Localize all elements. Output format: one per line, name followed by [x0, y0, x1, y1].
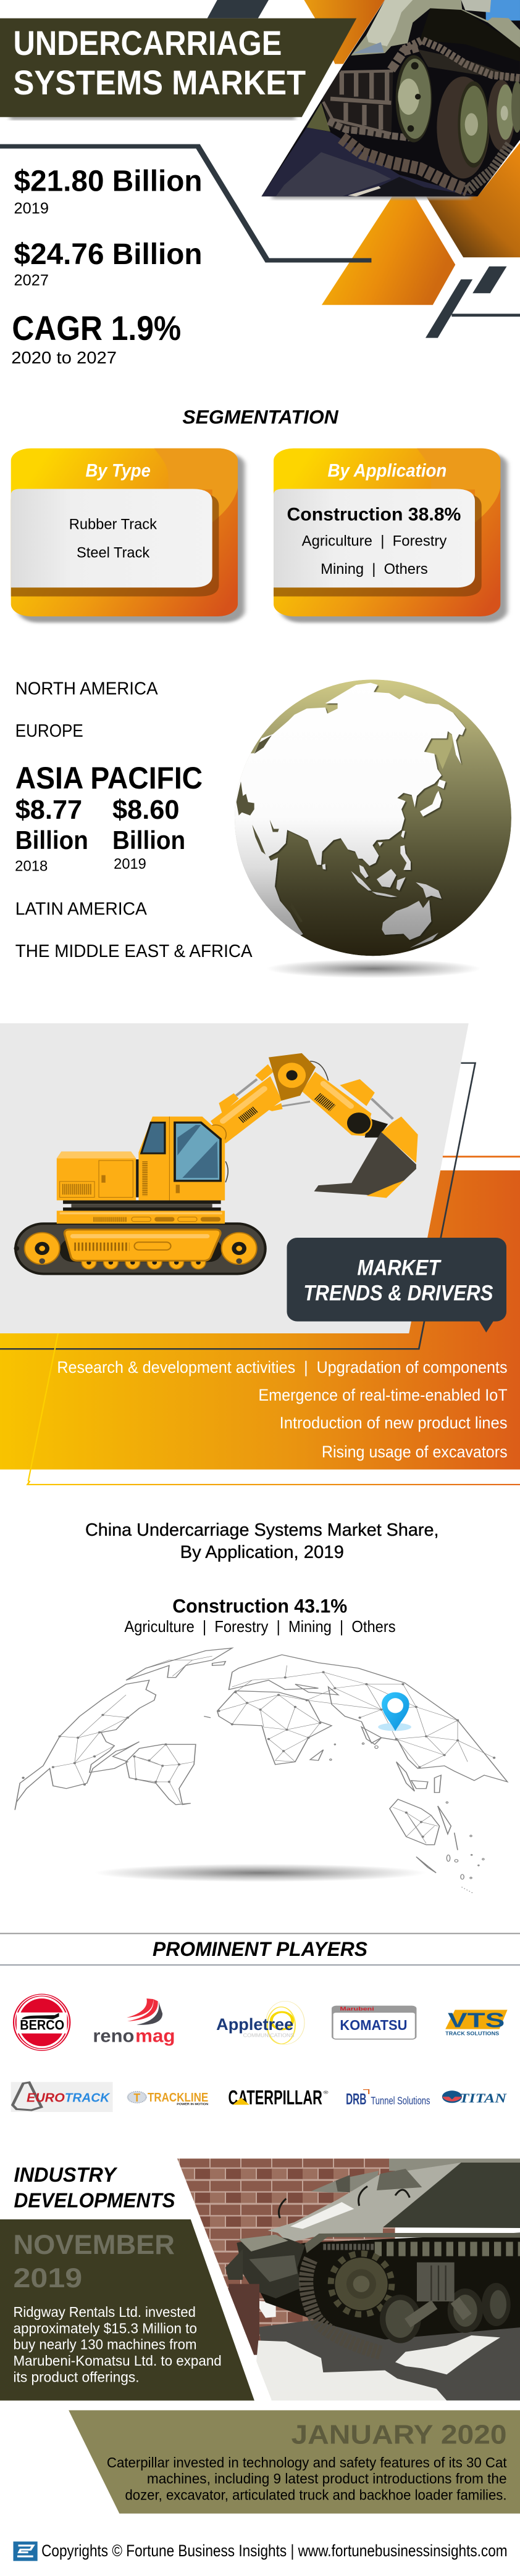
photo shadow [272, 194, 471, 199]
section: prominent players: CATERPILLAR [228, 2087, 322, 2109]
stat: 2027 value: 2027 [14, 272, 49, 289]
wireframe world map [15, 1648, 508, 1893]
logo: Renomag: mag [135, 2026, 175, 2046]
slate frame line [0, 1063, 476, 1349]
top slate stripe [208, 0, 269, 19]
tank in snow photo [177, 2158, 520, 2401]
logo: Titan: TITAN [459, 2091, 507, 2105]
callout: market trends and drivers: MARKET [357, 1255, 442, 1280]
Asia Pacific highlight: $8.77 [15, 795, 82, 825]
title [13, 24, 306, 102]
stat: 2019 value [14, 165, 203, 217]
small slate shapes [426, 267, 520, 338]
logo: Komatsu: Marubeni [340, 2007, 374, 2012]
logo: Appletree: Appletree [216, 2015, 293, 2034]
stat: CAGR: 2020 to 2027 [11, 348, 117, 367]
icon: excavator [14, 1053, 418, 1274]
segmentation heading: SEGMENTATION [182, 406, 339, 428]
top orange shape [304, 0, 385, 64]
region list [15, 679, 253, 961]
section: China share [15, 1481, 520, 1893]
chart title: By Application, 2019 [180, 1542, 344, 1562]
card: by application: Mining | Others [321, 560, 428, 577]
logo: Komatsu: KOMATSU [340, 2018, 407, 2033]
stat: 2019 value: $21.80 Billion [14, 165, 203, 197]
panel: November 2019: 2019 [13, 2263, 82, 2293]
Asia Pacific highlight: $8.60 [112, 795, 180, 825]
title banner [0, 19, 356, 117]
logo: Trackline: T [133, 2092, 141, 2104]
panel: November 2019: buy nearly 130 machines from [13, 2337, 196, 2353]
heading: PROMINENT PLAYERS [153, 1938, 367, 1960]
globe shadow [267, 959, 480, 978]
yellow frame line [28, 1333, 58, 1481]
stat: CAGR: CAGR 1.9% [12, 309, 181, 347]
logo: Renomag: reno [93, 2026, 134, 2046]
section: prominent players: Tunnel Solutions [371, 2095, 430, 2106]
logo: Komatsu [332, 2006, 416, 2040]
Asia Pacific highlight: 2018 [15, 858, 48, 874]
icon: location pin [378, 1692, 411, 1731]
chart title [85, 1520, 438, 1562]
orange accent line [443, 1156, 520, 1158]
orange panel [0, 1170, 520, 1470]
logo: DRB: DRB [346, 2090, 366, 2108]
card: by type [11, 449, 245, 623]
logo: Eurotrack: TRACK [65, 2091, 110, 2105]
card: by type: Rubber Track [69, 516, 157, 532]
section: segmentation [11, 406, 508, 623]
panel: November 2019: Ridgway Rentals Ltd. invested [13, 2305, 196, 2321]
card: by type: By Type [86, 460, 151, 481]
Asia Pacific highlight: ASIA PACIFIC [15, 760, 203, 795]
logo: Appletree [216, 2001, 304, 2044]
right orange shape [426, 143, 520, 257]
panel: November 2019: NOVEMBER [13, 2229, 175, 2260]
chart title: China Undercarriage Systems Market Share, [85, 1520, 438, 1539]
title: SYSTEMS MARKET [13, 64, 306, 102]
section: globe [229, 679, 511, 978]
logo: Caterpillar: ® [324, 2090, 329, 2095]
panel: January 2020 [69, 2410, 520, 2514]
connector line [0, 146, 371, 260]
heading [14, 2163, 175, 2212]
Asia Pacific highlight: Billion [112, 826, 185, 855]
section: header [208, 0, 520, 305]
gray panel [0, 1023, 469, 1333]
logo: Appletree: COMMUNICATIONS [243, 2032, 295, 2039]
stat: 2027 value: $24.76 Billion [14, 238, 203, 271]
section: regions [15, 679, 253, 961]
card: by application [274, 449, 508, 623]
panel: November 2019 [0, 2219, 254, 2401]
logo: VTS: VTS [448, 2009, 505, 2032]
panel: November 2019: approximately $15.3 Million to [13, 2321, 197, 2337]
logo: Caterpillar [228, 2087, 329, 2109]
logo: Renomag [93, 1998, 175, 2046]
logo: Berco: BERCO [20, 2018, 64, 2033]
section: market trends [0, 1023, 520, 1481]
Asia Pacific highlight [15, 760, 203, 874]
region list: THE MIDDLE EAST & AFRICA [15, 941, 253, 961]
tank track photo [259, 0, 520, 197]
logo: Trackline: TRACKLINE [148, 2090, 208, 2104]
region list: LATIN AMERICA [15, 899, 147, 919]
stat: 2027 value [14, 238, 203, 289]
callout: market trends and drivers [287, 1238, 506, 1333]
trends list [57, 1358, 508, 1461]
share text: Construction 43.1% [172, 1595, 347, 1617]
region list: EUROPE [15, 721, 83, 740]
Asia Pacific highlight: 2019 [114, 855, 146, 872]
region list: NORTH AMERICA [15, 679, 158, 698]
logo: VTS: TRACK SOLUTIONS [445, 2031, 499, 2037]
logo: Trackline: POWER IN MOTION [177, 2103, 209, 2106]
share text [124, 1595, 396, 1636]
share text: Agriculture | Forestry | Mining | Others [124, 1618, 396, 1636]
orange trapezoid [322, 196, 455, 305]
logo: Trackline [128, 2090, 209, 2106]
section: prominent players [0, 1933, 520, 2112]
Asia Pacific highlight: Billion [15, 826, 88, 855]
logo: Eurotrack: EURO [27, 2091, 65, 2105]
logo: Eurotrack [11, 2082, 113, 2112]
panel: November 2019: Marubeni-Komatsu Ltd. to expand [13, 2353, 222, 2369]
banner shadow [10, 116, 295, 120]
yellow frame line bottom [28, 1481, 520, 1485]
heading: DEVELOPMENTS [14, 2189, 175, 2212]
stat: 2019 value: 2019 [14, 200, 49, 217]
section: industry developments [0, 2163, 520, 2561]
panel: November 2019: its product offerings. [13, 2370, 140, 2385]
globe [229, 679, 511, 956]
card: by type: Steel Track [77, 544, 150, 561]
logo: Berco [14, 1994, 70, 2050]
heading: INDUSTRY [14, 2163, 117, 2186]
map shadow [94, 1864, 426, 1882]
icon: Fortune Business Insights logo [13, 2541, 38, 2561]
title: UNDERCARRIAGE [13, 24, 282, 62]
logo: DRB [346, 2090, 430, 2108]
logo: Titan [442, 2090, 507, 2105]
stat: CAGR [11, 309, 181, 367]
